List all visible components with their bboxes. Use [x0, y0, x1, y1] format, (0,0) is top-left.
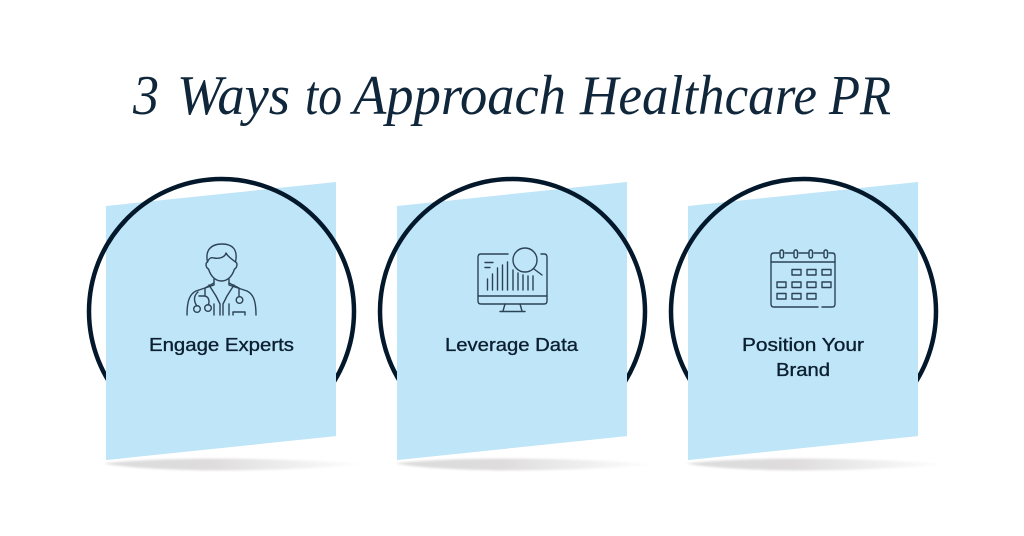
title: Healthcare	[579, 65, 817, 127]
shadow	[104, 459, 368, 470]
shadow	[395, 459, 659, 470]
ring	[89, 179, 354, 444]
title	[132, 65, 891, 127]
shadow	[686, 459, 950, 470]
panel lower part covering ring	[688, 345, 918, 460]
panel lower part covering ring	[106, 345, 336, 460]
label: Leverage Data	[445, 334, 579, 355]
icon: calendar	[771, 250, 835, 307]
panel: Leverage Data	[380, 179, 659, 470]
icon: doctor	[187, 244, 256, 315]
panel: Position Your Brand	[671, 179, 950, 470]
title: Ways	[177, 65, 290, 127]
ring	[671, 179, 936, 444]
title: 3	[132, 65, 159, 127]
title: PR	[828, 65, 891, 127]
label: Engage Experts	[149, 334, 294, 355]
blue panel	[688, 182, 918, 460]
blue panel	[106, 182, 336, 460]
ring	[380, 179, 645, 444]
label: Position Your	[742, 334, 864, 355]
icon: monitor with magnifier	[478, 248, 547, 312]
blue panel	[397, 182, 627, 460]
title: to	[305, 65, 342, 127]
panel lower part covering ring	[397, 345, 627, 460]
label: Brand	[776, 359, 830, 380]
title: Approach	[349, 65, 566, 127]
panel: Engage Experts	[89, 179, 368, 470]
